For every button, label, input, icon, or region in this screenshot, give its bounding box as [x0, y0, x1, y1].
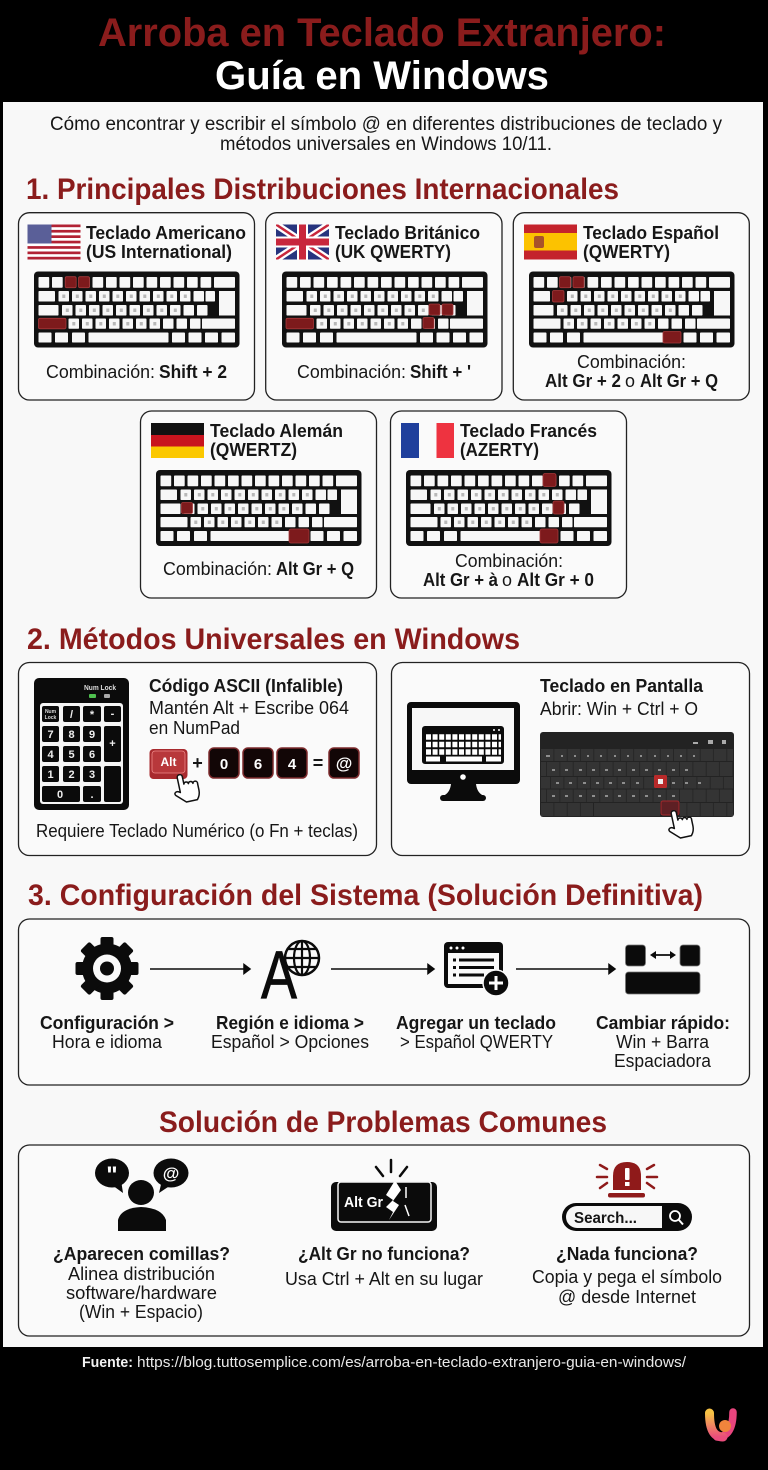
panel: ASCII code — [18, 662, 376, 856]
text: ASCII method: Mantén Alt + Escribe 064 — [149, 697, 349, 718]
combination: German — [163, 558, 354, 579]
combination: German: Alt Gr + Q — [276, 558, 354, 579]
panel: US keyboard — [18, 213, 254, 400]
keyboard: US — [34, 272, 240, 348]
icon: numeric keypad: Lock — [45, 715, 57, 721]
text: quotes problem: ¿Aparecen comillas? — [53, 1243, 230, 1264]
heading: Spanish — [583, 222, 719, 262]
icon: search bar: Search... — [574, 1210, 637, 1227]
panel: system configuration — [18, 919, 750, 1085]
icon: gear — [76, 937, 138, 1000]
title: Guía en Windows — [215, 54, 549, 98]
heading: UK — [335, 222, 480, 262]
step: add keyboard — [396, 1012, 556, 1052]
combination: French: o — [502, 569, 512, 590]
heading: German: Teclado Alemán — [210, 420, 343, 441]
heading: UK: Teclado Británico — [335, 222, 480, 243]
icon: numeric keypad: 8 — [68, 729, 75, 741]
combination: French: Alt Gr + à — [423, 569, 499, 590]
heading: French — [460, 420, 597, 460]
source footer: https://blog.tuttosemplice.com/es/arroba-en-teclado-extranjero-guia-en-windows/ — [137, 1354, 687, 1371]
text: ASCII method: en NumPad — [149, 717, 240, 738]
key sequence: Alt + 0 6 4 = @: + — [192, 753, 203, 773]
step: quick switch: Win + Barra — [616, 1031, 710, 1052]
source footer: Fuente: — [82, 1354, 133, 1371]
text: Alt Gr problem: ¿Alt Gr no funciona? — [298, 1243, 470, 1264]
step: region and language: Región e idioma > — [216, 1012, 364, 1033]
combination: US — [46, 361, 227, 382]
heading: Spanish: (QWERTY) — [583, 241, 670, 262]
icon: numeric keypad: + — [109, 738, 116, 750]
title — [98, 11, 666, 98]
key sequence: Alt + 0 6 4 = @: 4 — [288, 756, 297, 773]
icon: numeric keypad: 5 — [68, 749, 75, 761]
step: quick switch — [596, 1012, 730, 1071]
text: on-screen keyboard — [540, 675, 704, 719]
text: ASCII method — [149, 675, 349, 738]
text: quotes problem: (Win + Espacio) — [79, 1301, 203, 1322]
text: numpad note: Requiere Teclado Numérico (o Fn + teclas) — [36, 820, 358, 841]
key sequence: Alt + 0 6 4 = @: 0 — [220, 756, 228, 773]
icon: numeric keypad: / — [70, 709, 73, 721]
key sequence: Alt + 0 6 4 = @: @ — [336, 754, 352, 773]
text: ASCII method: Código ASCII (Infalible) — [149, 675, 343, 696]
intro text — [50, 113, 722, 155]
icon: numeric keypad: 0 — [57, 789, 63, 801]
arrow — [331, 964, 434, 974]
icon: language and globe: A — [261, 937, 298, 1013]
icon: French flag — [401, 423, 454, 458]
icon: keyboard switch shortcut — [626, 945, 700, 994]
keyboard: French — [406, 470, 612, 546]
heading: UK: (UK QWERTY) — [335, 241, 451, 262]
text: nothing works: Copia y pega el símbolo — [532, 1266, 722, 1287]
combination: Spanish: o — [625, 370, 635, 391]
combination: US: Combinación: — [46, 361, 155, 382]
image: on-screen keyboard — [540, 732, 734, 817]
icon: numeric keypad: 1 — [47, 769, 54, 781]
combination: UK — [297, 361, 471, 382]
heading: US — [86, 222, 246, 262]
icon: numeric keypad: - — [111, 708, 115, 720]
text: on-screen keyboard: Teclado en Pantalla — [540, 675, 704, 696]
key sequence: Alt + 0 6 4 = @: 6 — [254, 756, 262, 773]
icon: Spanish flag — [524, 224, 577, 260]
text: quotes problem — [53, 1243, 230, 1322]
text: nothing works: ¿Nada funciona? — [556, 1243, 698, 1264]
icon: broken Alt Gr key: Alt Gr — [344, 1194, 383, 1211]
icon: numeric keypad: Num — [45, 709, 57, 715]
icon: numeric keypad: Num Lock — [84, 685, 116, 692]
heading: French: (AZERTY) — [460, 439, 539, 460]
step: add keyboard: Agregar un teclado — [396, 1012, 556, 1033]
combination: UK: Shift + ' — [410, 361, 471, 382]
icon: numeric keypad: 4 — [47, 749, 54, 761]
icon: broken Alt Gr key — [331, 1160, 437, 1231]
step: settings — [40, 1012, 174, 1052]
heading: French: Teclado Francés — [460, 420, 597, 441]
panel: on-screen keyboard — [392, 662, 750, 856]
heading: US: (US International) — [86, 241, 232, 262]
icon: monitor — [407, 702, 520, 801]
icon: UK flag — [276, 224, 329, 260]
intro text: métodos universales en Windows 10/11. — [220, 133, 552, 155]
arrow — [516, 964, 615, 974]
text: nothing works — [532, 1243, 722, 1307]
icon: person with speech bubbles: " — [106, 1162, 118, 1189]
panel: Spanish keyboard — [513, 213, 749, 400]
icon: pressing hand — [665, 807, 695, 840]
combination: German: Combinación: — [163, 558, 272, 579]
title: Arroba en Teclado Extranjero: — [98, 11, 666, 55]
step: add keyboard: > Español QWERTY — [400, 1031, 553, 1052]
heading: troubleshooting: Solución de Problemas Comunes — [159, 1106, 607, 1139]
icon: numeric keypad: 7 — [47, 729, 54, 741]
text: quotes problem: Alinea distribución — [68, 1263, 215, 1284]
combination: Spanish: Alt Gr + 2 — [545, 370, 621, 391]
step: region and language: Español > Opciones — [211, 1031, 369, 1052]
icon: person with speech bubbles: @ — [163, 1164, 179, 1183]
icon: numeric keypad: 6 — [89, 749, 95, 761]
icon: numeric keypad: 2 — [68, 769, 75, 781]
heading: section 1: 1. Principales Distribuciones Internacionales — [26, 173, 619, 206]
combination: Spanish — [545, 351, 718, 391]
icon: numeric keypad: 9 — [89, 729, 95, 741]
panel: German keyboard — [140, 411, 376, 598]
key sequence: Alt + 0 6 4 = @: Alt — [160, 755, 176, 769]
step: settings: Configuración > — [40, 1012, 174, 1033]
icon: person with speech bubbles — [95, 1158, 188, 1231]
combination: Spanish: Combinación: — [577, 351, 686, 372]
panel: troubleshooting — [18, 1145, 750, 1336]
text: on-screen keyboard: Abrir: Win + Ctrl + O — [540, 698, 698, 719]
heading: Spanish: Teclado Español — [583, 222, 719, 243]
text: quotes problem: software/hardware — [66, 1282, 217, 1303]
combination: French — [423, 550, 594, 590]
panel: UK keyboard — [266, 213, 502, 400]
keyboard: UK — [282, 272, 488, 348]
combination: Spanish: Alt Gr + Q — [640, 370, 718, 391]
icon: numeric keypad: 3 — [89, 769, 95, 781]
icon: numeric keypad: . — [90, 789, 94, 801]
text: nothing works: @ desde Internet — [558, 1286, 696, 1307]
keyboard: German — [156, 470, 362, 546]
heading: section 3: 3. Configuración del Sistema (Solución Definitiva) — [28, 879, 703, 912]
step: region and language — [211, 1012, 369, 1052]
step: settings: Hora e idioma — [52, 1031, 163, 1052]
combination: French: Alt Gr + 0 — [517, 569, 594, 590]
arrow — [150, 964, 250, 974]
text: Alt Gr problem — [285, 1243, 483, 1289]
key sequence: Alt + 0 6 4 = @: = — [313, 753, 323, 773]
heading: US: Teclado Americano — [86, 222, 246, 243]
keyboard: Spanish — [529, 272, 734, 348]
intro text: Cómo encontrar y escribir el símbolo @ en diferentes distribuciones de teclado y — [50, 113, 722, 135]
combination: French: Combinación: — [455, 550, 563, 571]
combination: US: Shift + 2 — [159, 361, 227, 382]
heading: German: (QWERTZ) — [210, 439, 297, 460]
icon: US flag — [28, 224, 80, 260]
icon: add keyboard list — [444, 942, 509, 996]
icon: search bar — [562, 1203, 692, 1231]
icon: numeric keypad — [34, 678, 129, 810]
key sequence: Alt + 0 6 4 = @ — [150, 748, 359, 779]
combination: UK: Combinación: — [297, 361, 406, 382]
icon: pressing hand — [171, 771, 201, 804]
panel: French keyboard — [390, 411, 626, 598]
logo — [710, 1412, 733, 1437]
icon: German flag — [151, 423, 204, 458]
heading: section 2: 2. Métodos Universales en Windows — [27, 623, 520, 656]
step: quick switch: Espaciadora — [614, 1050, 712, 1071]
heading: German — [210, 420, 343, 460]
step: quick switch: Cambiar rápido: — [596, 1012, 730, 1033]
icon: numeric keypad: * — [90, 709, 95, 721]
text: Alt Gr problem: Usa Ctrl + Alt en su lugar — [285, 1268, 483, 1289]
icon: alarm — [597, 1162, 657, 1198]
